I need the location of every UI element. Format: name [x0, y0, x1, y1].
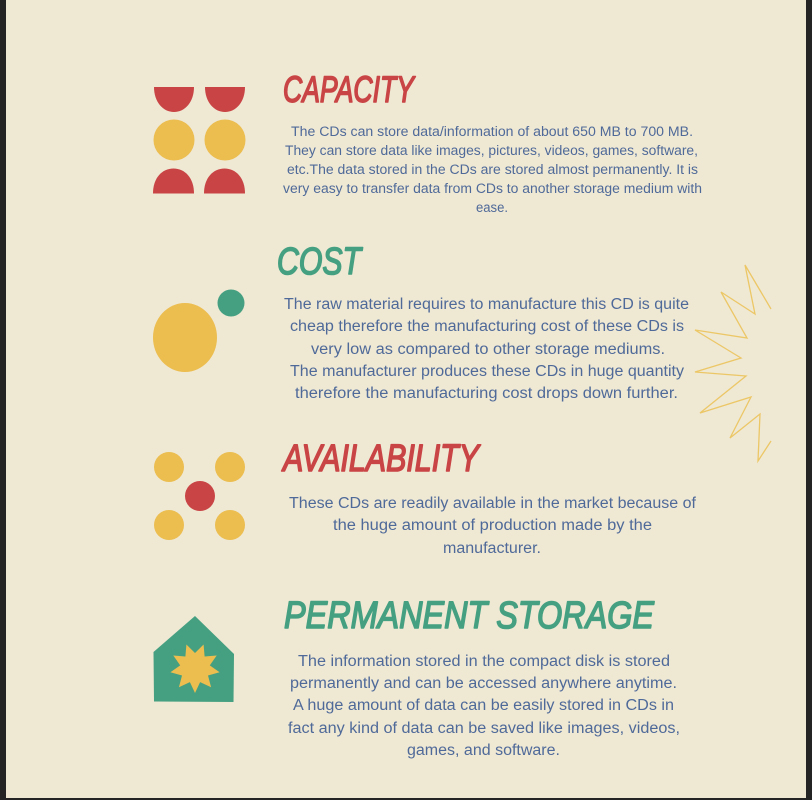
heading: cost: COST: [277, 241, 363, 283]
text: cost description: The manufacturer produces these CDs in huge quantity: [290, 363, 684, 380]
text: cost description: cheap therefore the manufacturing cost of these CDs is: [290, 318, 684, 335]
text: capacity description: They can store data like images, pictures, videos, games, software,: [285, 143, 698, 158]
heading: availability: AVAILABILITY: [281, 438, 481, 480]
text: permanent storage description: permanently and can be accessed anywhere anytime.: [290, 675, 677, 692]
icon: cost circles: [153, 290, 244, 372]
text: capacity description: ease.: [476, 200, 508, 215]
text: availability description: the huge amount of production made by the: [333, 517, 652, 534]
text: capacity description: The CDs can store data/information of about 650 MB to 700 MB.: [291, 124, 693, 139]
text: cost description: [284, 296, 689, 402]
text: permanent storage description: The information stored in the compact disk is stored: [298, 653, 670, 670]
decoration: hand-drawn yellow starburst: [695, 265, 771, 461]
text: cost description: therefore the manufacturing cost drops down further.: [295, 385, 678, 402]
text: availability description: These CDs are readily available in the market because of: [289, 495, 697, 512]
text: availability description: manufacturer.: [443, 540, 541, 557]
text: availability description: [289, 495, 697, 557]
icon: availability dots: [154, 452, 245, 540]
icon: green house with yellow star: [154, 616, 234, 702]
heading: permanent storage: PERMANENT STORAGE: [284, 595, 655, 637]
text: cost description: very low as compared to other storage mediums.: [311, 341, 665, 358]
text: capacity description: etc.The data stored in the CDs are stored almost permanently. It is: [287, 162, 698, 177]
heading: capacity: CAPACITY: [283, 69, 416, 110]
text: permanent storage description: fact any kind of data can be saved like images, videos,: [288, 720, 680, 737]
icon: capacity half circles and circles: [153, 87, 246, 194]
text: cost description: The raw material requires to manufacture this CD is quite: [284, 296, 689, 313]
text: capacity description: very easy to transfer data from CDs to another storage medium with: [283, 181, 702, 196]
text: permanent storage description: A huge amount of data can be easily stored in CDs in: [293, 697, 674, 714]
text: capacity description: [283, 124, 702, 215]
text: permanent storage description: [288, 653, 680, 759]
text: permanent storage description: games, and software.: [407, 742, 560, 759]
